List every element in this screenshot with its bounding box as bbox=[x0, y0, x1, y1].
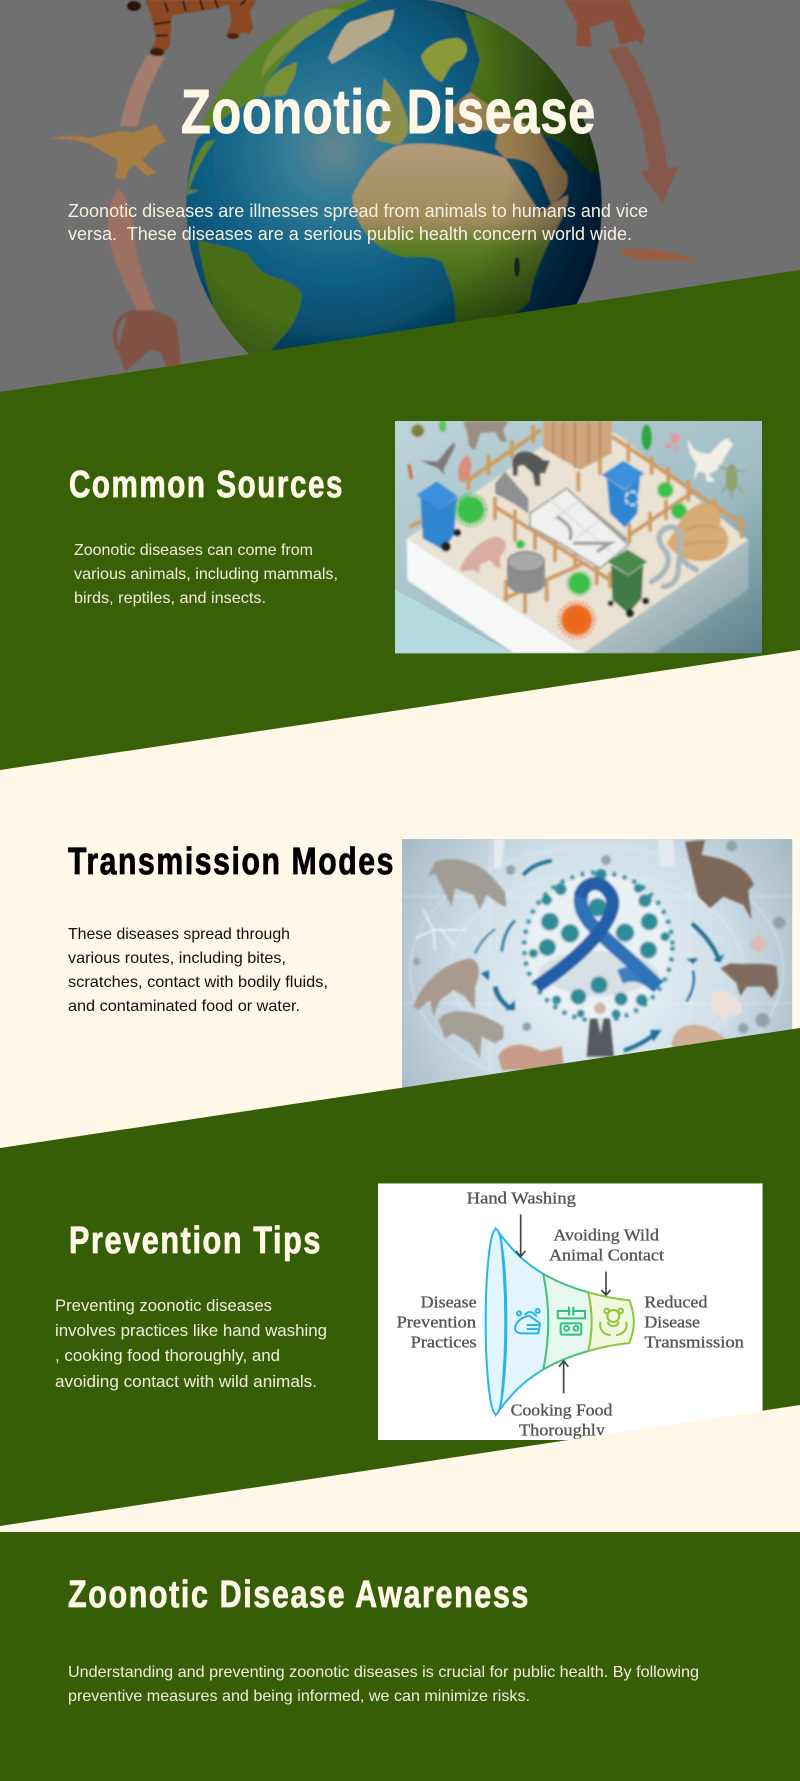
green spore top left bbox=[439, 420, 446, 432]
text: prevention tips bbox=[55, 1296, 327, 1391]
label: hand washing: Hand Washing bbox=[467, 1188, 577, 1207]
blue bin left bbox=[417, 482, 461, 552]
icon: bear in hands bbox=[600, 1309, 627, 1335]
label: reduced disease transmission bbox=[644, 1292, 745, 1351]
text: prevention tips: avoiding contact with wild animals. bbox=[55, 1372, 317, 1391]
arrow: cooking food bbox=[559, 1361, 568, 1393]
globe bbox=[186, 0, 602, 354]
text: transmission modes bbox=[68, 926, 328, 1015]
shape: animal fragment bbox=[618, 249, 698, 261]
land: iberia and med coast bbox=[375, 78, 409, 145]
pink figure bbox=[665, 430, 682, 453]
text: prevention tips: , cooking food thoroughly, and bbox=[55, 1346, 280, 1365]
teal arrows bbox=[475, 861, 718, 1051]
text: common sources: birds, reptiles, and insects. bbox=[74, 590, 266, 607]
title: Zoonotic Disease bbox=[181, 78, 596, 147]
text: prevention tips: Preventing zoonotic diseases bbox=[55, 1296, 272, 1315]
arrow: tiger to rodent bbox=[120, 55, 165, 126]
label: disease prevention practices: Practices bbox=[411, 1332, 477, 1351]
sheep top left bbox=[428, 859, 507, 910]
land: hudson area bbox=[263, 62, 297, 97]
teal arrowheads bbox=[481, 954, 724, 1042]
intro text: Zoonotic diseases are illnesses spread from animals to humans and vice bbox=[68, 201, 648, 221]
land: south america bbox=[197, 240, 303, 354]
tan animal bottom right bbox=[672, 1025, 730, 1060]
spiky green viruses bbox=[457, 483, 686, 594]
label: avoiding wild animal contact bbox=[549, 1226, 664, 1265]
label: avoiding wild animal contact: Avoiding Wild bbox=[553, 1226, 660, 1245]
tile path bbox=[495, 472, 628, 568]
land: canada highlight bbox=[262, 8, 345, 78]
brown animal right bbox=[721, 963, 778, 998]
text: transmission modes: various routes, including bites, bbox=[68, 950, 286, 967]
icon: ram bbox=[115, 310, 181, 372]
heading: transmission modes: Transmission Modes bbox=[68, 841, 395, 883]
label: reduced disease transmission: Transmission bbox=[644, 1332, 745, 1351]
arrow: avoiding wild animal contact bbox=[601, 1272, 611, 1295]
text: common sources bbox=[74, 542, 338, 607]
heading: common sources: Common Sources bbox=[69, 464, 344, 506]
text: awareness bbox=[68, 1664, 699, 1705]
heading: zoonotic disease awareness: Zoonotic Disease Awareness bbox=[68, 1574, 530, 1616]
land: africa bbox=[352, 143, 568, 330]
text: transmission modes: and contaminated food or water. bbox=[68, 998, 300, 1015]
text: common sources: various animals, including mammals, bbox=[74, 566, 338, 583]
icon: cooking pot bbox=[558, 1307, 585, 1335]
tan coil bbox=[667, 503, 728, 561]
small virus top left bbox=[412, 425, 423, 436]
text: transmission modes: scratches, contact with bodily fluids, bbox=[68, 974, 328, 991]
icon: washing hands bbox=[515, 1309, 540, 1333]
land: asia bbox=[465, 12, 608, 175]
text: transmission modes: These diseases spread through bbox=[68, 926, 290, 943]
mite bug bbox=[718, 464, 745, 498]
icon: rodent bbox=[48, 124, 166, 179]
small particles bbox=[414, 841, 785, 1033]
funnel mouth bbox=[486, 1229, 506, 1414]
arrow: rodent to ram bbox=[108, 188, 155, 311]
blue bin center bbox=[602, 461, 644, 528]
land: middle east bbox=[445, 92, 568, 206]
grey hen bbox=[421, 442, 455, 475]
globe edge shading bbox=[200, 1, 602, 354]
hero background bbox=[0, 0, 800, 400]
virus sphere bbox=[524, 870, 672, 1021]
funnel segment: lime bbox=[588, 1292, 634, 1351]
wooden crate bbox=[543, 421, 612, 470]
intro text: versa. These diseases are a serious public health concern world wide. bbox=[68, 224, 632, 244]
cow bbox=[463, 421, 508, 450]
label: reduced disease transmission: Disease bbox=[644, 1312, 700, 1331]
land: europe bbox=[421, 38, 467, 82]
panel: transmission modes background bbox=[0, 650, 800, 1200]
funnel segment: blue bbox=[496, 1229, 548, 1414]
label: cooking food thoroughly: Cooking Food bbox=[511, 1401, 613, 1420]
white hen bbox=[688, 438, 733, 482]
land: north america bbox=[195, 0, 380, 140]
icon: goat silhouette bbox=[565, 0, 645, 47]
orange virus bbox=[561, 605, 592, 635]
icon: tiger bbox=[127, 0, 256, 56]
brown animal top right bbox=[685, 840, 754, 920]
rod bbox=[407, 464, 413, 479]
pink microbe bbox=[457, 455, 472, 484]
pink animal bottom bbox=[498, 1045, 563, 1070]
land: greenland bbox=[328, 10, 394, 64]
top figures bbox=[493, 839, 675, 868]
heading: prevention tips: Prevention Tips bbox=[69, 1220, 322, 1262]
label: reduced disease transmission: Reduced bbox=[644, 1292, 708, 1311]
label: cooking food thoroughly bbox=[511, 1401, 613, 1440]
funnel segment: green bbox=[543, 1274, 592, 1369]
land: madagascar bbox=[514, 257, 520, 277]
text: common sources: Zoonotic diseases can come from bbox=[74, 542, 313, 559]
grey worm bbox=[652, 527, 697, 587]
panel: awareness footer bbox=[0, 1532, 800, 1781]
label: disease prevention practices: Disease bbox=[421, 1292, 477, 1311]
panel: prevention tips background bbox=[0, 1028, 800, 1600]
text: awareness: preventive measures and being informed, we can minimize risks. bbox=[68, 1688, 530, 1705]
fences bbox=[411, 427, 743, 612]
panel: cream diagonal band bbox=[0, 1405, 800, 1532]
label: disease prevention practices bbox=[397, 1292, 477, 1351]
hero illustration: animal transmission cycle bbox=[48, 0, 698, 372]
platform bbox=[407, 423, 748, 653]
intro text bbox=[68, 201, 648, 244]
label: disease prevention practices: Prevention bbox=[397, 1312, 477, 1331]
label: cooking food thoroughly: Thoroughly bbox=[519, 1421, 606, 1440]
panel: common sources background bbox=[0, 270, 800, 1000]
blue ribbon bbox=[537, 884, 658, 987]
label: avoiding wild animal contact: Animal Contact bbox=[549, 1246, 664, 1265]
pink pig bbox=[460, 537, 506, 573]
image: animals around a virus sphere with ribbon bbox=[402, 839, 792, 1099]
image: isometric farm with disease sources bbox=[395, 420, 762, 653]
ground rings bbox=[402, 839, 792, 1093]
land: central america bbox=[187, 140, 215, 195]
spider bbox=[415, 910, 467, 950]
green spore top bbox=[642, 425, 652, 450]
arrow: hand washing bbox=[516, 1214, 525, 1257]
white sheep right bbox=[710, 990, 742, 1027]
text: prevention tips: involves practices like hand washing bbox=[55, 1321, 327, 1340]
green bin bbox=[607, 549, 649, 618]
text: awareness: Understanding and preventing zoonotic diseases is crucial for public health. By following bbox=[68, 1664, 699, 1681]
man in suit bbox=[587, 1003, 614, 1057]
animal lower left bbox=[438, 1011, 503, 1058]
pink particle bbox=[751, 937, 766, 951]
chart: prevention funnel diagram bbox=[378, 1183, 763, 1440]
animal left middle bbox=[413, 958, 479, 1017]
arrow: goat to ground bbox=[607, 46, 679, 203]
grey cylinder bbox=[507, 552, 545, 594]
black pig bbox=[513, 452, 550, 486]
